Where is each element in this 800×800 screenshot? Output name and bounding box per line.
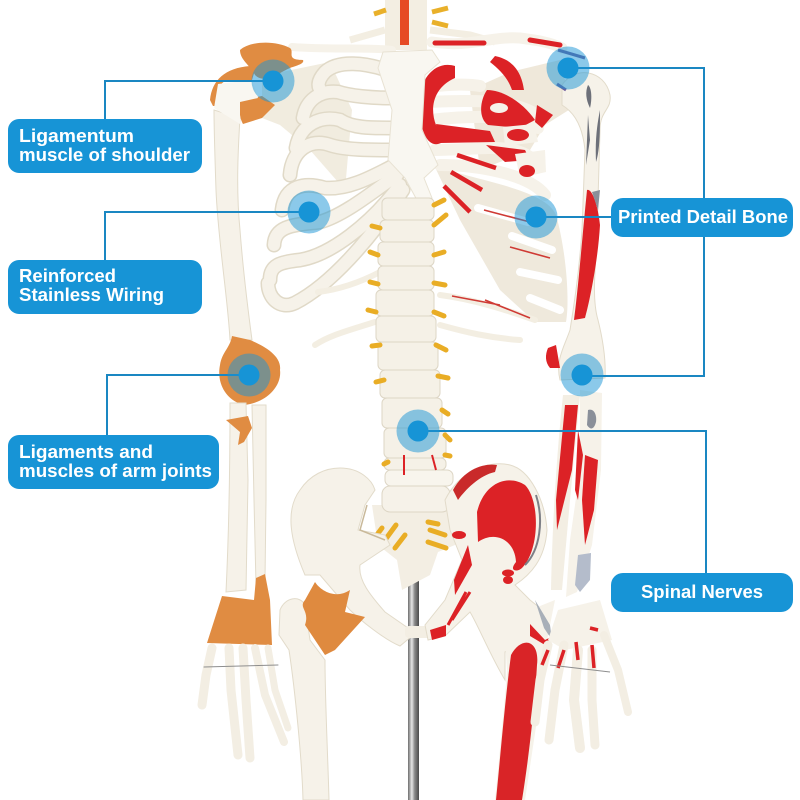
label: Printed Detail Bone bbox=[611, 198, 793, 237]
right forearm bones bbox=[551, 390, 602, 597]
marker: right shoulder bbox=[546, 46, 590, 90]
left wrist ligament bbox=[207, 574, 272, 645]
marker: right ribs bbox=[514, 196, 558, 238]
label: Reinforced Stainless Wiring bbox=[8, 260, 202, 314]
label: Ligaments and muscles of arm joints bbox=[8, 435, 219, 489]
clavicles bbox=[292, 38, 562, 50]
support pole bbox=[408, 525, 419, 800]
marker: wiring bbox=[288, 190, 330, 234]
right humerus markings bbox=[546, 85, 600, 368]
skeleton model bbox=[202, 0, 628, 800]
left shoulder head bbox=[214, 80, 258, 124]
left shoulder ligaments bbox=[210, 43, 303, 124]
label: Ligaments and muscles of arm joints: muscles of arm joints bbox=[19, 461, 212, 481]
right femur bbox=[495, 600, 555, 800]
left rib cage bbox=[268, 64, 403, 345]
sternum bbox=[378, 50, 440, 202]
left pelvis bbox=[291, 468, 412, 646]
marker: right elbow bbox=[560, 354, 604, 396]
label: Printed Detail Bone: Printed Detail Bone bbox=[618, 207, 788, 227]
marker: spine bbox=[396, 410, 440, 452]
spine bbox=[376, 198, 453, 512]
label: Ligamentum muscle of shoulder: muscle of shoulder bbox=[19, 145, 190, 165]
right pelvis bbox=[425, 464, 547, 680]
left hip ligament bbox=[303, 582, 365, 655]
scapula right bbox=[470, 60, 572, 170]
right rib muscle markings bbox=[420, 56, 553, 318]
label: Spinal Nerves: Spinal Nerves bbox=[641, 582, 763, 602]
right rib cage bbox=[430, 85, 568, 340]
leader lines bbox=[105, 68, 706, 573]
scapula left bbox=[262, 62, 352, 190]
right shoulder markings bbox=[557, 50, 585, 90]
left forearm bones bbox=[226, 403, 266, 592]
spinal nerves yellow bbox=[368, 200, 450, 548]
right humerus bbox=[559, 73, 610, 380]
left elbow ligament bbox=[219, 336, 280, 405]
pubic bridge bbox=[405, 626, 437, 638]
label: Reinforced Stainless Wiring: Reinforced bbox=[19, 266, 116, 286]
label: Ligamentum muscle of shoulder bbox=[8, 119, 202, 173]
left hand bbox=[202, 648, 288, 758]
right hand bbox=[535, 600, 628, 748]
label: Ligamentum muscle of shoulder: Ligamentum bbox=[19, 126, 134, 146]
label: Reinforced Stainless Wiring: Stainless Wiring bbox=[19, 285, 164, 305]
label: Ligaments and muscles of arm joints: Ligaments and bbox=[19, 442, 153, 462]
marker: shoulder bbox=[252, 60, 294, 102]
neck vertebrae bbox=[350, 0, 495, 50]
sacrum and coccyx bbox=[372, 505, 476, 590]
left arm knob ligament bbox=[226, 416, 252, 445]
left femur bbox=[279, 599, 329, 800]
spine red markings bbox=[404, 455, 436, 475]
left humerus bbox=[214, 110, 252, 340]
label: Spinal Nerves bbox=[611, 573, 793, 612]
marker: elbow bbox=[228, 354, 270, 396]
